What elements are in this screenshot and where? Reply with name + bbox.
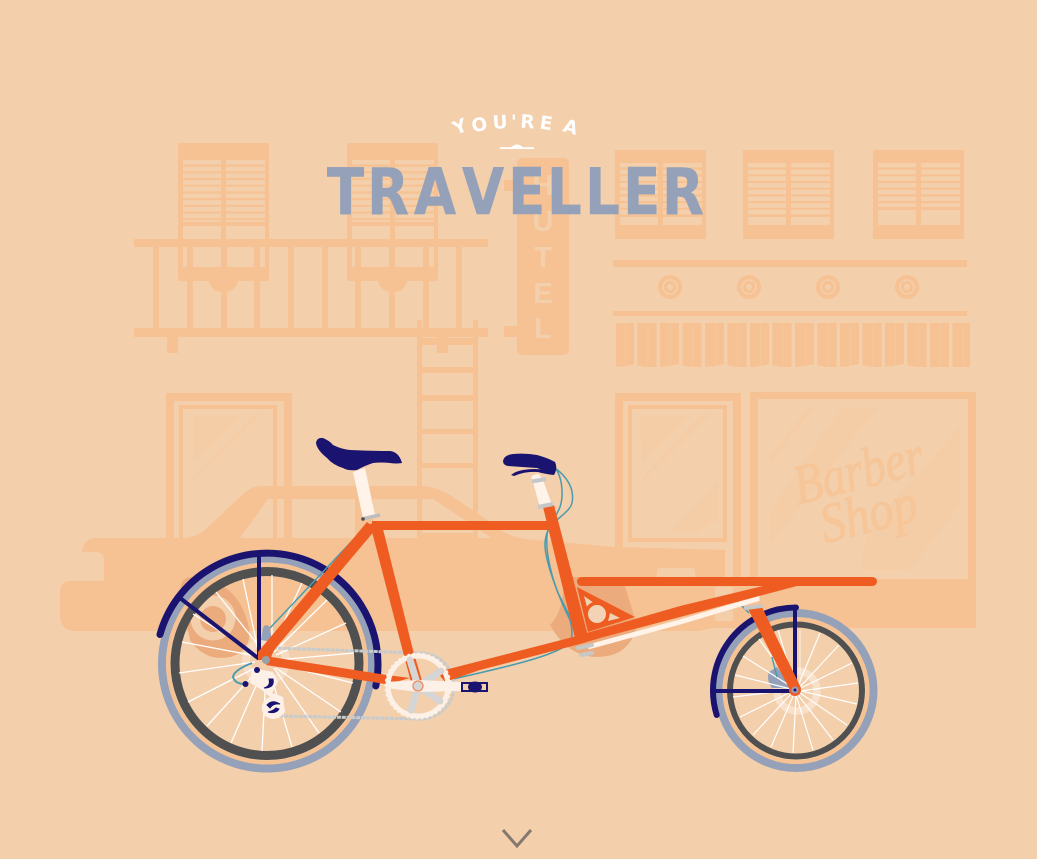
rear wheel	[162, 558, 372, 768]
barber shop lettering: Barber	[787, 425, 930, 517]
white cargo under-tube	[588, 590, 757, 647]
seat stay	[258, 522, 376, 660]
car rear wheel	[180, 577, 249, 658]
head tube	[543, 505, 589, 642]
car headlight	[657, 568, 695, 580]
rear mudguard and stays	[160, 553, 378, 686]
rear brake disc	[246, 641, 286, 681]
heading: you're a: YOU'RE A	[449, 112, 581, 140]
background: street buildings	[60, 143, 976, 658]
ornament under heading	[500, 144, 534, 149]
handlebar grip and brake lever	[503, 454, 556, 476]
pedal	[462, 682, 487, 692]
scroll-down chevron	[503, 830, 531, 846]
hotel sign: E	[533, 278, 553, 310]
top tube	[372, 521, 552, 530]
cargo rack	[577, 577, 877, 586]
frame	[258, 505, 877, 695]
seat tube	[370, 521, 423, 686]
left building: balcony railing	[134, 239, 488, 353]
chain stay	[266, 657, 410, 684]
front wheel	[718, 613, 874, 768]
front hub	[789, 684, 801, 696]
right doorway	[619, 397, 737, 597]
barber shop window	[750, 392, 976, 628]
crank arm	[386, 680, 462, 692]
front fork	[748, 607, 801, 695]
bottom bracket clamps	[578, 606, 761, 655]
parked car silhouette	[60, 486, 976, 658]
hotel sign	[504, 158, 569, 355]
ladder	[417, 320, 478, 542]
title: traveller: TRAVELLER	[327, 156, 704, 230]
left building: shutter windows	[178, 143, 438, 292]
rear derailleur	[250, 656, 285, 719]
saddle	[316, 438, 402, 470]
left doorway	[170, 397, 288, 597]
cables	[233, 468, 777, 684]
triangle gussets	[584, 596, 620, 623]
hotel sign: L	[534, 313, 552, 345]
cargo triangle	[577, 587, 635, 632]
front mudguard and stays	[713, 607, 796, 715]
main cargo tube	[437, 586, 797, 682]
chainring and crank	[386, 654, 487, 718]
barber shop lettering	[787, 425, 930, 556]
right building: shutter windows	[615, 150, 964, 239]
bicycle	[160, 438, 877, 768]
car front wheel	[550, 577, 637, 657]
front spokes	[733, 630, 858, 753]
chain	[273, 648, 454, 719]
hotel sign: T	[534, 242, 552, 274]
hotel sign: U	[533, 206, 553, 238]
front brake disc	[777, 671, 817, 711]
awning	[616, 323, 970, 368]
rear spokes	[179, 575, 354, 751]
handlebar stem	[531, 474, 553, 508]
barber shop lettering: Shop	[813, 472, 924, 556]
hotel sign: H	[533, 170, 553, 202]
right building: cornice with rosettes	[613, 260, 967, 316]
seat post	[353, 468, 380, 521]
